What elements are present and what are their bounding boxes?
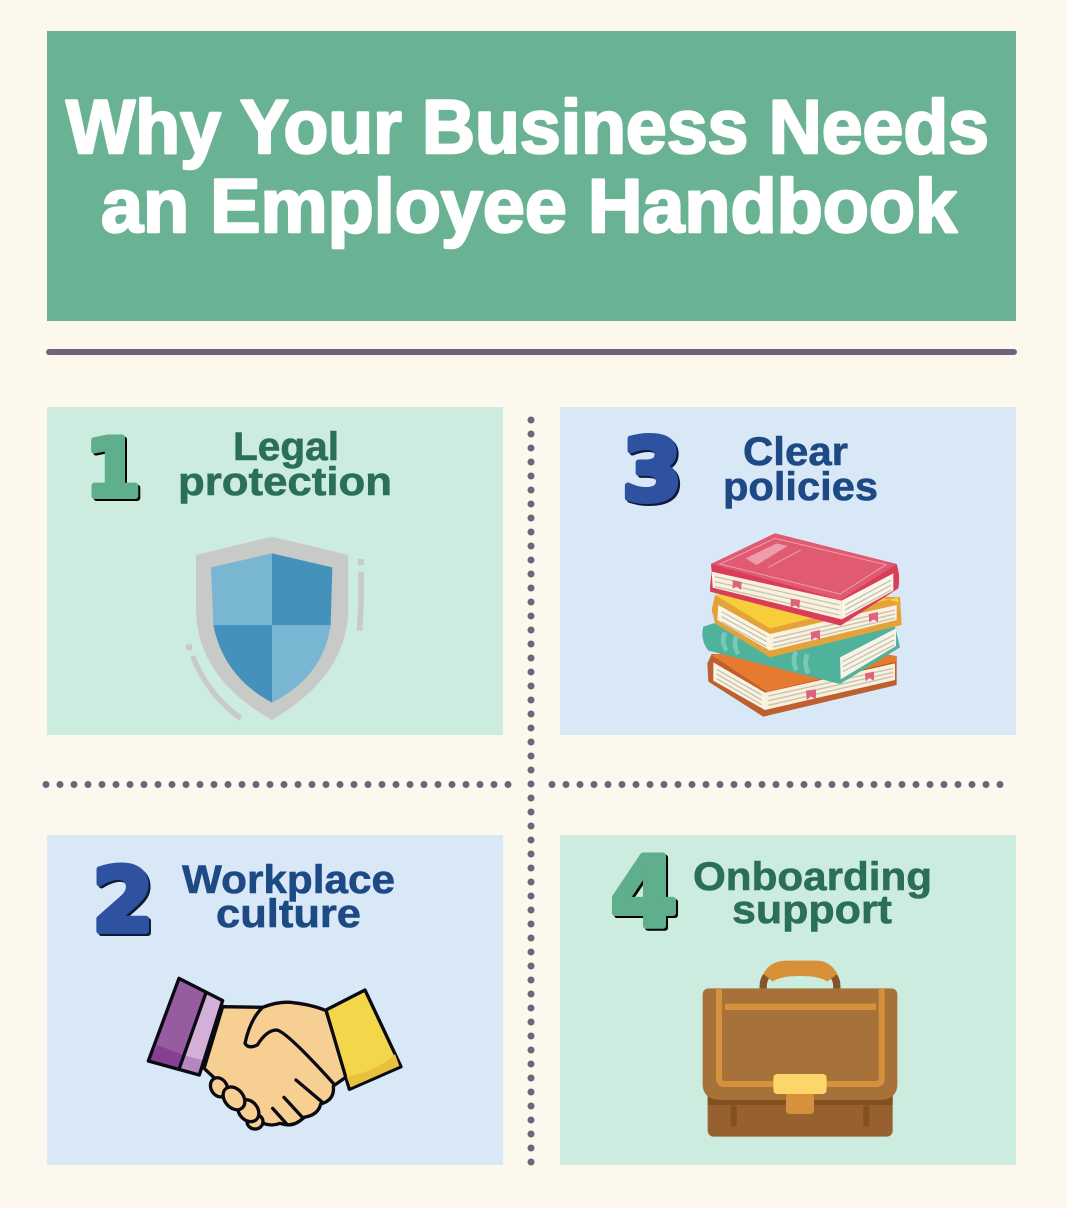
heading: clear policies	[723, 430, 878, 509]
panel: onboarding support	[560, 835, 1016, 1165]
heading: workplace culture	[182, 858, 395, 936]
heading: workplace culture: Workplace	[182, 858, 395, 902]
heading: clear policies: policies	[723, 465, 878, 509]
title: Why Your Business Needs	[66, 85, 989, 170]
number 4: 4	[613, 839, 679, 951]
number 1: 1	[87, 424, 143, 517]
number 3: 3	[622, 421, 682, 521]
heading: workplace culture: culture	[216, 892, 361, 936]
icon: shield	[186, 537, 364, 720]
title banner	[47, 31, 1016, 321]
heading: onboarding support: support	[732, 888, 892, 932]
icon: briefcase	[703, 961, 897, 1137]
panel: clear policies	[560, 407, 1016, 735]
number 4: 4	[611, 837, 677, 949]
heading: onboarding support: Onboarding	[693, 855, 932, 899]
title: an Employee Handbook	[101, 164, 958, 249]
heading: legal protection: protection	[178, 460, 392, 504]
number 3: 3	[624, 423, 684, 523]
icon: stack of books	[702, 533, 902, 717]
panel: workplace culture	[47, 835, 503, 1165]
number 2: 2	[92, 849, 154, 952]
icon: handshake	[148, 978, 401, 1129]
title	[66, 85, 989, 249]
heading: clear policies: Clear	[743, 430, 848, 474]
panel: legal protection	[47, 407, 503, 735]
number 1: 1	[85, 422, 141, 515]
number 2: 2	[94, 851, 156, 954]
heading: onboarding support	[693, 855, 932, 932]
heading: legal protection: Legal	[233, 425, 339, 469]
heading: legal protection	[178, 425, 392, 504]
